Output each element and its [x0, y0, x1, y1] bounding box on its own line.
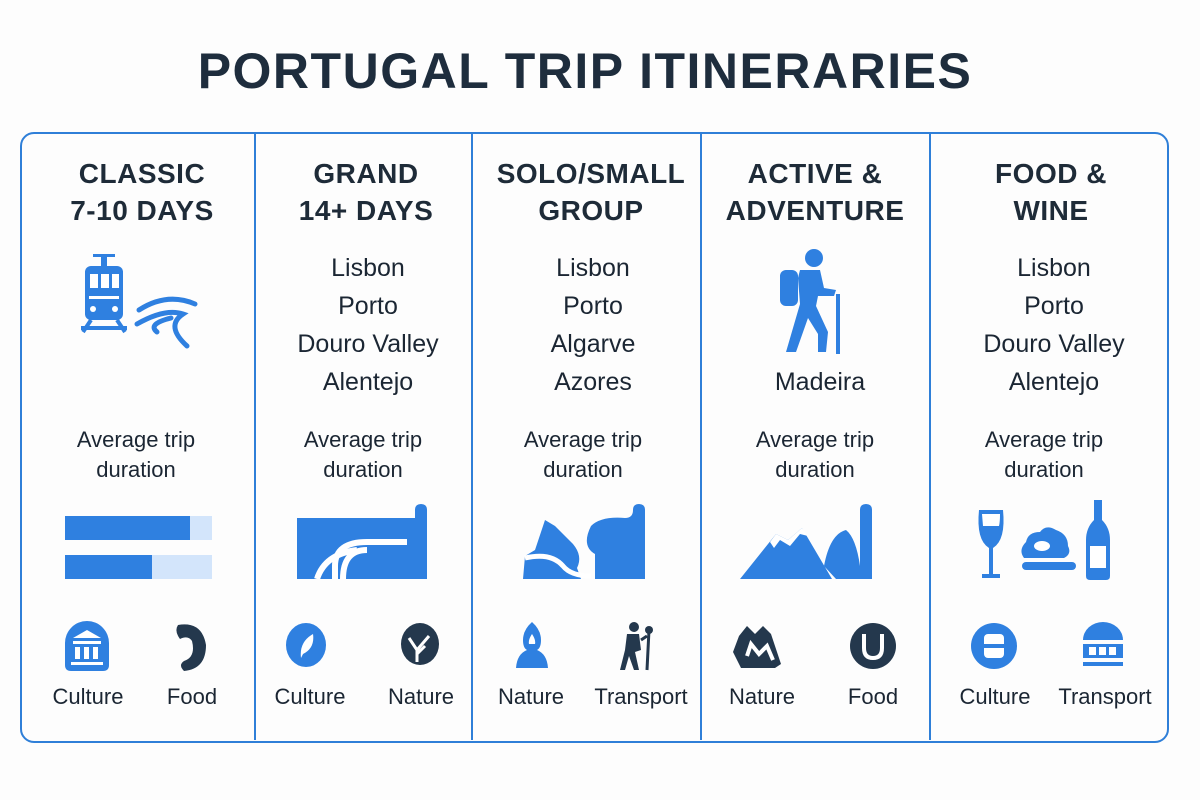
- heading: grand: GRAND: [313, 158, 419, 189]
- label: nature: Nature: [729, 684, 795, 709]
- label: food: Food: [848, 684, 898, 709]
- icon: wine glass, food, bottle: [978, 500, 1110, 580]
- heading: solo: SOLO/SMALL: [497, 158, 685, 189]
- list: solo destinations: Azores: [554, 368, 632, 396]
- text: average trip duration: [985, 427, 1103, 482]
- list: food destinations: Douro Valley: [983, 330, 1125, 358]
- icon: nature person: [516, 622, 548, 668]
- label: nature: Nature: [498, 684, 564, 709]
- text: average trip duration: [304, 427, 422, 482]
- label: culture: Culture: [960, 684, 1030, 709]
- icon: food: [176, 624, 206, 671]
- heading: active: ACTIVE &: [748, 158, 882, 189]
- icon: nature branch: [401, 623, 439, 665]
- icon: transport hiker: [620, 622, 653, 670]
- list: food destinations: Alentejo: [1009, 368, 1099, 396]
- list: grand destinations: Porto: [338, 292, 398, 320]
- list: food destinations: [983, 254, 1125, 396]
- list: solo destinations: [550, 254, 635, 396]
- heading: active: ADVENTURE: [726, 195, 904, 226]
- heading: food and wine: [995, 158, 1107, 226]
- label: transport: Transport: [594, 684, 688, 709]
- list: grand destinations: [297, 254, 439, 396]
- text: average trip duration: [77, 427, 195, 482]
- text: average trip duration: [756, 427, 874, 482]
- list: grand destinations: Alentejo: [323, 368, 413, 396]
- text: average trip duration: [524, 427, 642, 482]
- icon: food bowl: [850, 623, 896, 669]
- heading: solo: [497, 158, 685, 226]
- heading: solo: GROUP: [538, 195, 644, 226]
- label: transport: Transport: [1058, 684, 1152, 709]
- heading: food and wine: FOOD &: [995, 158, 1107, 189]
- heading: classic: 7-10 DAYS: [70, 195, 214, 226]
- heading: active: [726, 158, 904, 226]
- icon: coastal cliffs: [523, 504, 645, 579]
- icon: culture: [65, 621, 109, 671]
- heading: classic: [70, 158, 214, 226]
- text: average trip duration: Average trip: [77, 427, 195, 452]
- panel: food and wine: [960, 158, 1152, 709]
- label: nature: Nature: [388, 684, 454, 709]
- list: food destinations: Porto: [1024, 292, 1084, 320]
- list: solo destinations: Porto: [563, 292, 623, 320]
- icon: culture bag: [971, 623, 1017, 669]
- text: average trip duration: Average trip: [304, 427, 422, 452]
- label: food: Food: [167, 684, 217, 709]
- panel: active: [726, 158, 904, 709]
- label: culture: Culture: [275, 684, 345, 709]
- text: average trip duration: duration: [96, 457, 176, 482]
- icon: nature mountain: [733, 626, 781, 668]
- list: active destinations: Madeira: [775, 368, 865, 396]
- list: grand destinations: Lisbon: [331, 254, 405, 282]
- icon: tram and river: [81, 254, 198, 348]
- panel: classic: [53, 158, 217, 709]
- icon: mountains: [740, 504, 872, 579]
- text: average trip duration: Average trip: [985, 427, 1103, 452]
- list: solo destinations: Algarve: [551, 330, 635, 358]
- text: average trip duration: Average trip: [756, 427, 874, 452]
- icon: hiker: [780, 249, 840, 354]
- chart: duration bars: [65, 516, 212, 579]
- icon: river landscape: [297, 504, 427, 579]
- icon: culture leaf: [286, 623, 326, 667]
- heading: classic: CLASSIC: [79, 158, 205, 189]
- heading: food and wine: WINE: [1013, 195, 1089, 226]
- text: average trip duration: duration: [775, 457, 855, 482]
- text: average trip duration: duration: [323, 457, 403, 482]
- list: solo destinations: Lisbon: [556, 254, 630, 282]
- list: food destinations: Lisbon: [1017, 254, 1091, 282]
- text: average trip duration: duration: [1004, 457, 1084, 482]
- heading: grand: 14+ DAYS: [299, 195, 433, 226]
- text: average trip duration: duration: [543, 457, 623, 482]
- panel: solo: [497, 158, 688, 709]
- list: grand destinations: Douro Valley: [297, 330, 439, 358]
- text: average trip duration: Average trip: [524, 427, 642, 452]
- heading: grand: [299, 158, 433, 226]
- icon: transport building: [1083, 622, 1123, 666]
- outer frame: [20, 132, 1169, 743]
- label: culture: Culture: [53, 684, 123, 709]
- title: PORTUGAL TRIP ITINERARIES: [198, 43, 972, 99]
- panel: grand: [275, 158, 454, 709]
